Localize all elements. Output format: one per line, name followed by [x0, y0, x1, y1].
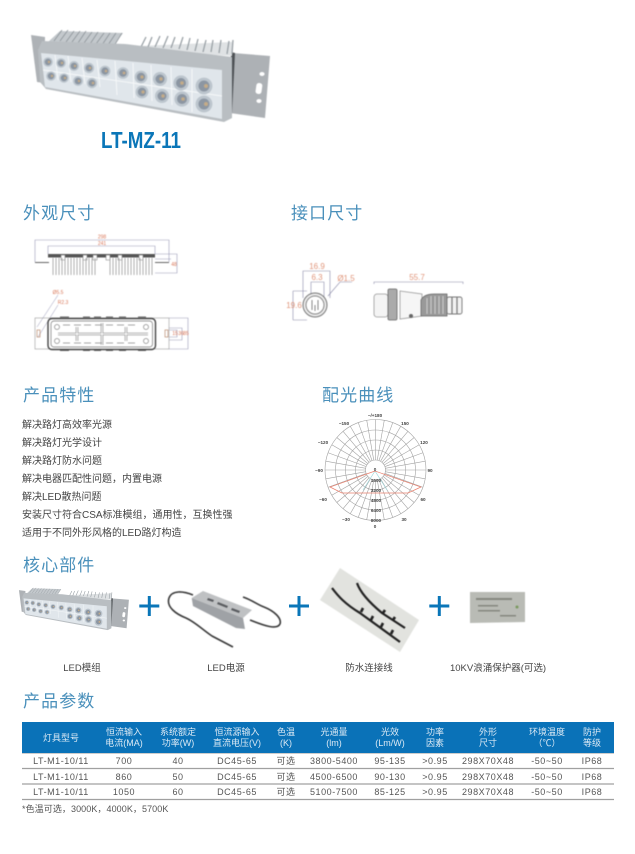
table header	[22, 722, 614, 753]
feature list: 解决LED散热问题	[22, 490, 101, 503]
diagram: exterior dimensions: 36	[178, 331, 184, 337]
table row 1: IP68	[582, 756, 602, 766]
table header: 色温	[277, 726, 295, 737]
feature list: 解决路灯光学设计	[22, 436, 102, 449]
table row 3	[33, 786, 602, 797]
diagram: exterior dimensions: 241	[98, 241, 106, 247]
polar chart: light distribution: 60	[420, 497, 426, 502]
table row 3: >0.95	[422, 787, 448, 797]
diagram: interface dimensions: Ø1.5	[337, 274, 355, 283]
feature list	[22, 418, 233, 539]
polar chart: light distribution: −90	[315, 468, 323, 473]
diagram: exterior dimensions: R2.3	[58, 300, 68, 306]
polar chart: light distribution: 30	[401, 517, 407, 522]
table row 3: 60	[172, 787, 184, 797]
diagram: exterior dimensions: 85	[183, 331, 189, 337]
table row 2: 90-130	[374, 772, 406, 782]
table row 3: IP68	[582, 787, 602, 797]
polar chart: light distribution: 120	[420, 440, 428, 445]
side connector drawing	[374, 282, 463, 320]
heading: core components: 核心部件	[23, 556, 95, 575]
heading: product features: 产品特性	[23, 386, 95, 405]
table row 3: DC45-65	[217, 787, 257, 797]
table row 3: 可选	[276, 786, 296, 797]
polar chart: light distribution: 0	[374, 467, 377, 472]
table row 3: 1050	[113, 787, 135, 797]
table header: 环境温度	[529, 726, 565, 737]
table row 2: 可选	[276, 771, 296, 782]
side view drawing	[35, 240, 177, 275]
table header: 功率	[426, 726, 444, 737]
table header: （℃）	[533, 738, 561, 748]
table header: 灯具型号	[43, 733, 79, 743]
diagram: exterior dimensions	[35, 234, 189, 350]
table header: 尺寸	[479, 737, 497, 748]
table header: 因素	[426, 737, 444, 748]
polar chart: light distribution: −60	[319, 497, 327, 502]
component captions: 防水连接线	[345, 662, 393, 674]
polar chart: light distribution: 8000	[371, 518, 382, 523]
polar chart: light distribution: 4800	[371, 498, 382, 503]
table header: 等级	[583, 737, 601, 748]
component captions: LED电源	[207, 662, 245, 674]
polar chart: light distribution: −150	[339, 421, 350, 426]
table header: (K)	[280, 738, 292, 748]
polar chart: light distribution: 3200	[371, 488, 382, 493]
model title: LT-MZ-11	[101, 127, 181, 153]
table row 3: LT-M1-10/11	[33, 787, 89, 797]
diagram: exterior dimensions: Ø5.5	[53, 290, 64, 296]
table header: 直流电压(V)	[213, 737, 261, 748]
component captions	[63, 662, 546, 674]
polar chart: light distribution: −30	[342, 517, 350, 522]
heading: light distribution curve: 配光曲线	[322, 386, 394, 405]
polar chart: light distribution: −120	[318, 440, 329, 445]
table row 3: 85-125	[374, 787, 406, 797]
table row 2: 50	[172, 772, 184, 782]
table header: 功率(W)	[162, 737, 194, 748]
heading: product parameters: 产品参数	[23, 692, 95, 711]
diagram: interface dimensions: 16.9	[309, 262, 325, 271]
table row 2: -50~50	[531, 772, 563, 782]
polar chart: light distribution: 90	[427, 468, 433, 473]
table header: 恒流源输入	[214, 726, 260, 737]
top view drawing	[35, 295, 188, 350]
table row 3: 5100-7500	[310, 787, 358, 797]
diagram: interface dimensions	[286, 262, 463, 320]
component: LED module	[19, 588, 129, 630]
table row 2: IP68	[582, 772, 602, 782]
polar chart: light distribution	[315, 413, 433, 529]
footnote: *色温可选，3000K，4000K，5700K	[22, 803, 168, 814]
diagram: exterior dimensions: 48	[171, 262, 177, 268]
table row 2: 298X70X48	[462, 772, 514, 782]
table row 1: 95-135	[374, 756, 406, 766]
plus sign	[429, 596, 449, 616]
table row 2: >0.95	[422, 772, 448, 782]
table row 2: LT-M1-10/11	[33, 772, 89, 782]
polar chart: light distribution: 150	[401, 421, 409, 426]
table row 2	[33, 771, 602, 782]
table row 1: 700	[116, 756, 132, 766]
plus sign	[139, 596, 159, 616]
feature list: 安装尺寸符合CSA标准模组，通用性，互换性强	[22, 508, 233, 521]
diagram: interface dimensions: 6.3	[311, 273, 323, 282]
table header: 防护	[583, 726, 601, 737]
diagram: exterior dimensions: 15	[172, 331, 178, 337]
table row 1	[33, 755, 602, 766]
diagram: exterior dimensions: 298	[98, 234, 106, 240]
polar chart: light distribution: 6400	[371, 508, 382, 513]
heading: exterior dimensions: 外观尺寸	[23, 204, 95, 223]
parameter table	[22, 722, 614, 800]
table header: (lm)	[326, 738, 342, 748]
polar chart: light distribution: 1600	[371, 478, 382, 483]
table header: 外形	[479, 726, 497, 737]
table row 3: 298X70X48	[462, 787, 514, 797]
feature list: 适用于不同外形风格的LED路灯构造	[22, 526, 181, 539]
table row 2: 4500-6500	[310, 772, 358, 782]
table header: 电流(MA)	[105, 737, 143, 748]
plus sign	[289, 596, 309, 616]
diagram: interface dimensions: 55.7	[409, 273, 425, 282]
diagram: interface dimensions: 19.6	[286, 301, 302, 310]
table row 1: 3800-5400	[310, 756, 358, 766]
table row 1: DC45-65	[217, 756, 257, 766]
table row 1: >0.95	[422, 756, 448, 766]
table header: 光通量	[320, 726, 348, 737]
component: LED driver	[168, 591, 280, 647]
polar chart: light distribution: 0	[374, 524, 377, 529]
table row 2: 860	[116, 772, 132, 782]
table row 2: DC45-65	[217, 772, 257, 782]
table row 3: -50~50	[531, 787, 563, 797]
feature list: 解决路灯高效率光源	[22, 418, 112, 431]
table header: 系统额定	[160, 726, 196, 737]
component: waterproof connector cable	[320, 568, 419, 652]
feature list: 解决电器匹配性问题，内置电源	[22, 472, 162, 485]
component captions: 10KV浪涌保护器(可选)	[450, 662, 546, 674]
heading: interface dimensions: 接口尺寸	[291, 204, 363, 223]
product image: LED module	[31, 30, 270, 122]
table row 1: 可选	[276, 755, 296, 766]
table header: 光效	[381, 726, 399, 737]
component: surge protector	[470, 592, 525, 623]
table row 1: 40	[172, 756, 184, 766]
table row 1: 298X70X48	[462, 756, 514, 766]
front connector drawing	[293, 271, 352, 320]
polar chart: light distribution: −/+180	[368, 413, 383, 418]
table header: (Lm/W)	[375, 738, 405, 748]
feature list: 解决路灯防水问题	[22, 454, 102, 467]
table row 1: LT-M1-10/11	[33, 756, 89, 766]
table header: 恒流输入	[106, 726, 142, 737]
component captions: LED模组	[63, 662, 101, 674]
table row 1: -50~50	[531, 756, 563, 766]
